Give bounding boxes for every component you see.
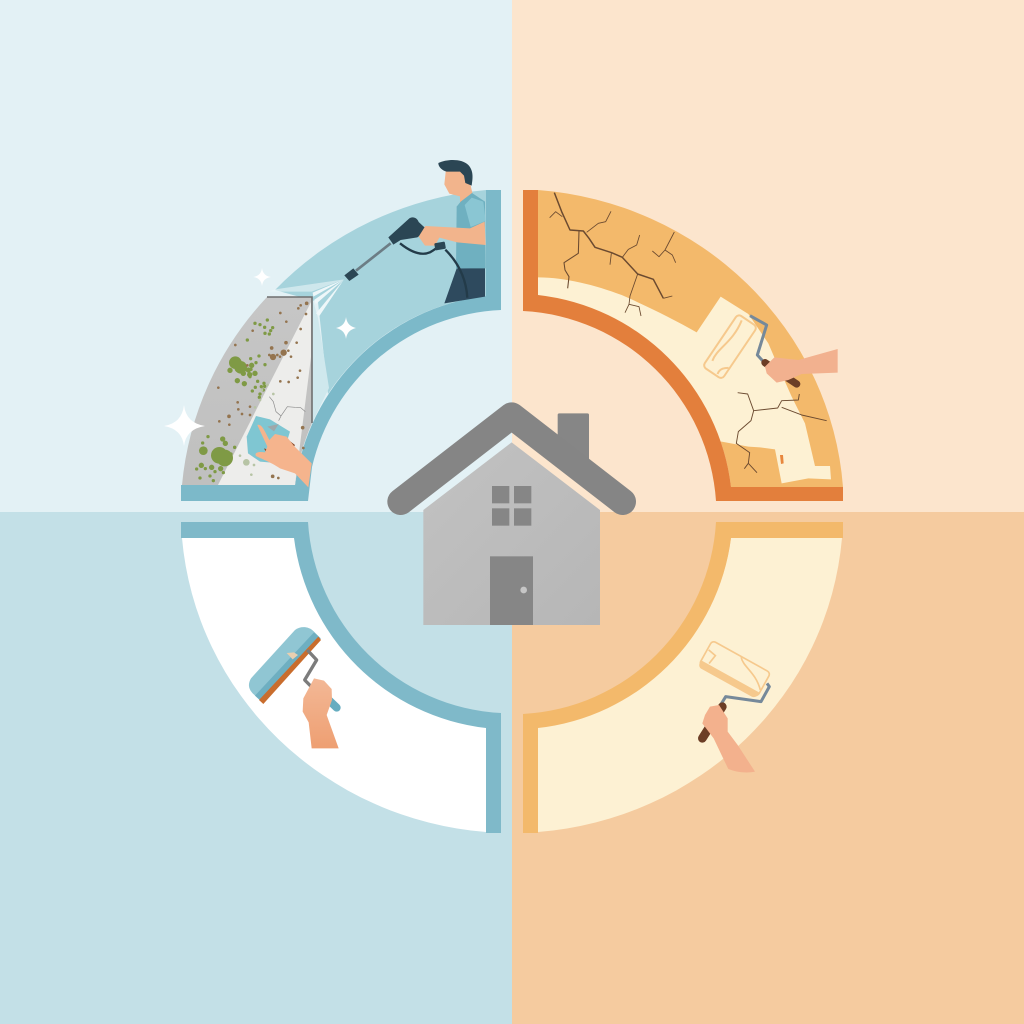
paint roller head — [698, 641, 771, 699]
cleaned wall streak — [218, 302, 311, 485]
sparkle: large left — [164, 405, 205, 446]
door knob — [520, 587, 527, 593]
quadrant background: bottom right — [512, 512, 1024, 1024]
trowel blade — [249, 627, 321, 703]
hand scrubbing with sponge — [247, 416, 312, 487]
trowel grip — [317, 688, 337, 708]
roller handle — [702, 707, 722, 738]
sleeve — [465, 198, 486, 227]
roller frame — [721, 683, 769, 704]
panel: top right, cracked wall being painted — [523, 190, 843, 501]
brown mould spots — [218, 303, 307, 478]
hose — [400, 243, 467, 298]
panel: bottom right, final paint coat — [523, 522, 843, 833]
window — [492, 486, 531, 526]
hairline wall crack — [269, 397, 305, 421]
chimney — [558, 413, 589, 465]
arm — [419, 222, 486, 246]
water spray — [268, 279, 344, 316]
sponge — [247, 416, 290, 463]
teal sector fill — [275, 190, 486, 394]
pale spray shadow — [312, 297, 329, 423]
cream wall — [538, 538, 842, 832]
teal frame band — [181, 522, 501, 833]
plaster dab — [287, 652, 298, 659]
trowel edge — [259, 637, 321, 704]
hair — [438, 160, 473, 186]
cream repaired area — [530, 277, 831, 483]
pale residue spots — [240, 385, 273, 475]
sparkle: near spray — [336, 317, 356, 339]
quadrant background: top left — [0, 0, 512, 512]
hand and arm — [765, 349, 838, 383]
blade shade stripe — [255, 632, 321, 703]
wall panel — [182, 297, 312, 485]
roof — [401, 416, 623, 502]
quadrant background: bottom left — [0, 512, 512, 1024]
scrubbed mark — [267, 424, 279, 431]
house body — [423, 442, 600, 625]
quadrant background: top right — [512, 0, 1024, 512]
wall edge — [267, 297, 312, 423]
t-shirt — [456, 193, 486, 268]
hose connector — [434, 241, 446, 251]
house — [401, 413, 623, 625]
hand and forearm — [702, 705, 755, 772]
teal frame band — [181, 190, 501, 501]
nozzle — [344, 268, 359, 281]
orange paint fleck — [780, 455, 784, 464]
hand and forearm — [256, 425, 312, 487]
worker — [400, 160, 486, 303]
lance — [356, 243, 391, 271]
orange frame band — [523, 190, 843, 501]
cracked orange wall — [538, 190, 843, 487]
sparkle: small top — [253, 268, 271, 286]
hand and forearm — [303, 678, 339, 748]
trousers — [444, 268, 485, 303]
wall cracks — [550, 193, 827, 473]
paint roller head — [703, 314, 757, 379]
amber frame band — [523, 522, 843, 833]
trowel handle bar — [305, 650, 317, 687]
face and neck — [444, 167, 473, 203]
roller handle — [765, 363, 797, 384]
white wall — [182, 538, 486, 832]
roller frame — [750, 316, 767, 363]
green mould spots — [197, 320, 273, 481]
door — [490, 556, 533, 625]
panel: bottom left, filling and smoothing — [181, 522, 501, 833]
pressure washer gun — [388, 217, 427, 245]
panel: top left, pressure washing and mould cleaning — [164, 160, 501, 501]
